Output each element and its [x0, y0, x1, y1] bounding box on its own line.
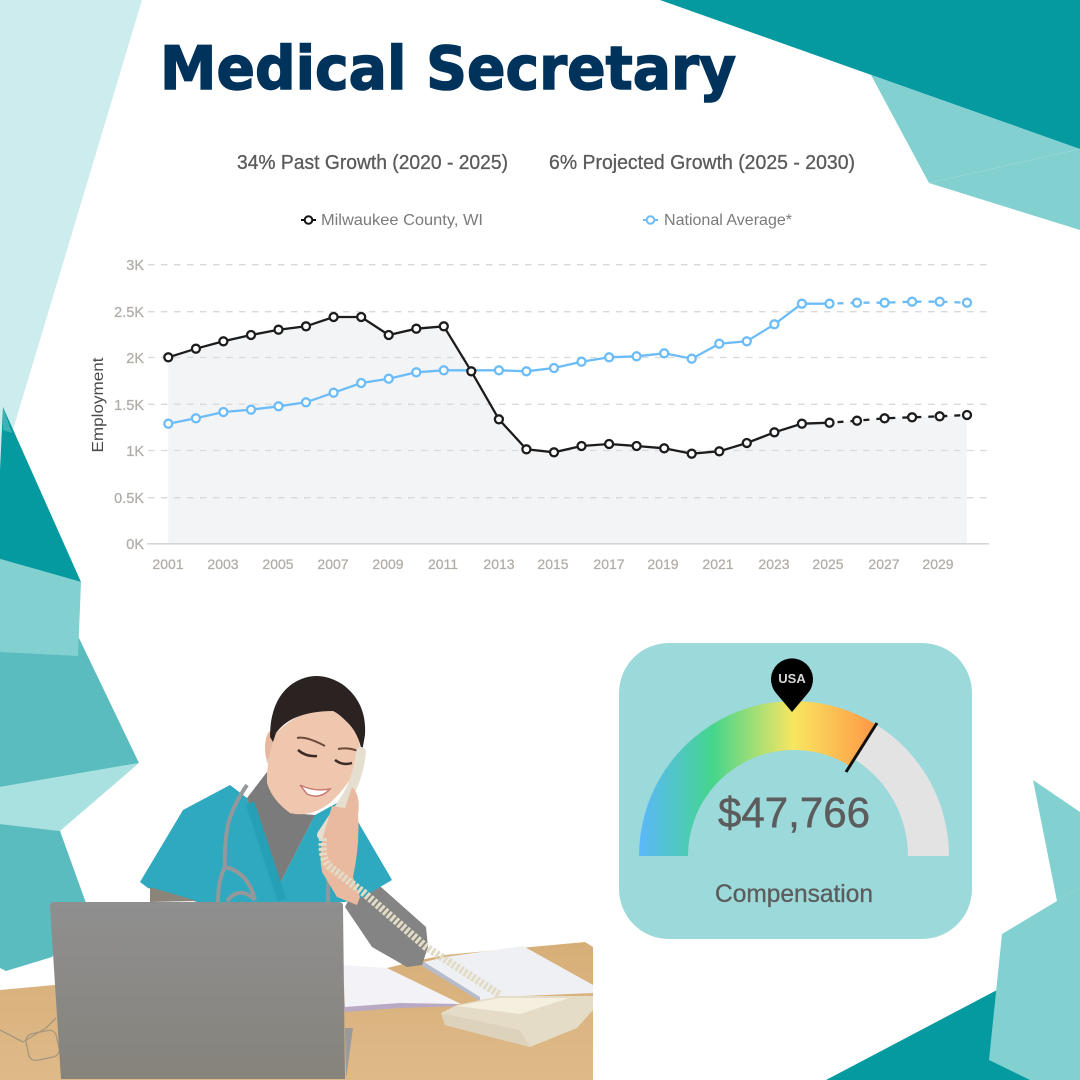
x axis labels: 2001	[152, 556, 184, 572]
y axis labels: 3K	[126, 258, 144, 274]
desk	[0, 942, 593, 1080]
x axis labels: 2019	[647, 556, 679, 572]
x axis labels: 2023	[758, 556, 790, 572]
x axis labels: 2017	[593, 556, 625, 572]
y axis labels: 2K	[126, 351, 144, 367]
x axis labels: 2027	[868, 556, 900, 572]
photo: medical secretary at desk	[0, 676, 593, 1080]
x axis labels: 2021	[702, 556, 734, 572]
decorative shapes: bottom right	[826, 780, 1080, 1080]
eyes and brows	[297, 738, 358, 764]
USA map pin: USA	[778, 671, 806, 686]
scrub top	[140, 785, 392, 902]
laptop	[50, 902, 353, 1079]
compensation label: Compensation	[715, 880, 873, 908]
ear and earring	[265, 731, 277, 765]
second stethoscope tube	[326, 880, 330, 902]
y axis labels	[114, 258, 144, 553]
forearm and hand	[321, 787, 360, 905]
compensation value: $47,766	[718, 789, 870, 837]
open book	[343, 965, 462, 1012]
x axis labels: 2009	[372, 556, 404, 572]
decorative shapes: top right	[660, 0, 1080, 230]
right sleeve	[345, 877, 428, 967]
coiled telephone cord	[323, 838, 500, 995]
decorative shapes: top left	[0, 0, 142, 582]
stethoscope	[218, 785, 255, 902]
telephone handset	[322, 752, 361, 835]
employment line chart	[90, 258, 989, 572]
shaded area under Milwaukee line	[168, 317, 967, 544]
gauge colored arc	[639, 701, 877, 856]
x axis labels: 2029	[922, 556, 954, 572]
x axis labels: 2013	[483, 556, 515, 572]
decorative shapes: left side	[0, 559, 139, 971]
y axis labels: 1.5K	[114, 398, 144, 414]
binder with papers	[422, 946, 593, 1001]
gauge value tick	[846, 723, 877, 772]
y axis labels: 1K	[126, 444, 144, 460]
y axis labels: 2.5K	[114, 305, 144, 321]
y axis labels: 0.5K	[114, 491, 144, 507]
y axis labels: 0K	[126, 537, 144, 553]
x axis labels: 2015	[537, 556, 569, 572]
face	[267, 710, 361, 814]
panel: compensation gauge	[619, 643, 972, 939]
x axis labels: 2025	[812, 556, 844, 572]
turtleneck	[247, 772, 315, 887]
x axis labels: 2003	[207, 556, 239, 572]
left undersleeve	[150, 887, 197, 902]
woman	[140, 676, 500, 995]
National Average series	[164, 298, 971, 428]
x axis labels: 2007	[317, 556, 349, 572]
smile	[300, 785, 330, 796]
hair	[270, 676, 365, 752]
x axis labels	[152, 556, 954, 572]
x axis labels: 2005	[262, 556, 294, 572]
Milwaukee County series	[164, 313, 971, 458]
growth stat: projected: 6% Projected Growth (2025 - 2030)	[549, 152, 855, 174]
legend	[301, 212, 792, 229]
legend item: Milwaukee County: Milwaukee County, WI	[321, 212, 483, 229]
eyeglasses	[0, 1018, 61, 1062]
telephone base	[441, 996, 593, 1047]
scrub collar	[250, 803, 282, 900]
x axis labels: 2011	[428, 556, 458, 572]
y axis title: Employment	[90, 357, 107, 452]
gauge remainder arc	[855, 725, 949, 856]
title: Medical Secretary	[160, 34, 736, 104]
USA map pin	[771, 658, 813, 712]
legend item: National Average: National Average*	[664, 212, 792, 229]
growth stat: past: 34% Past Growth (2020 - 2025)	[237, 152, 508, 174]
